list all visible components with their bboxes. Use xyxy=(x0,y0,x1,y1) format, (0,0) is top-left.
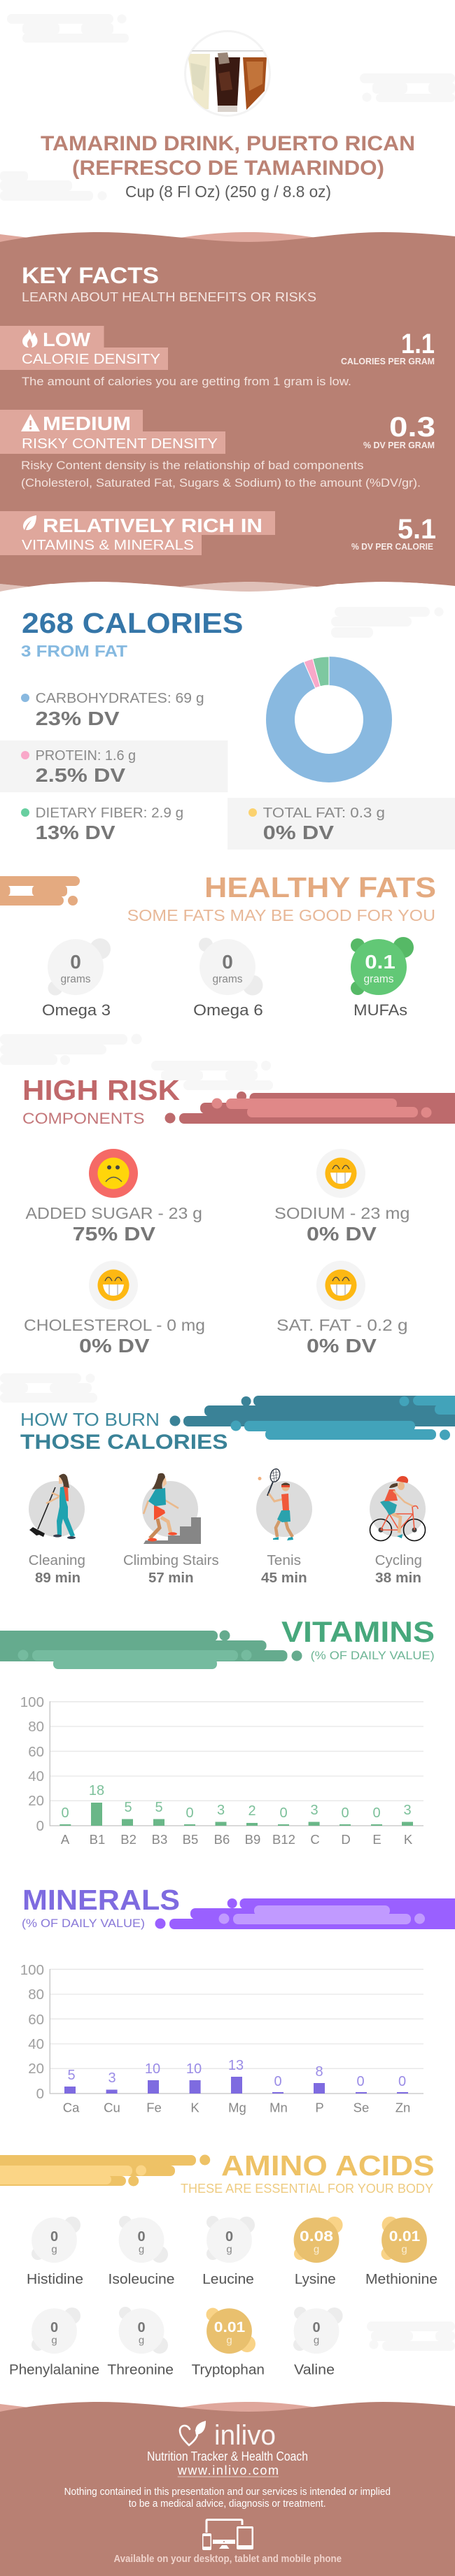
bar chart: vitamins: B6 xyxy=(214,1832,230,1847)
amino: tryptophan: 0.01 xyxy=(214,2319,246,2335)
activity: climbing stairs: Climbing Stairs xyxy=(123,1553,219,1568)
fact: low calorie density: The amount of calories you are getting from 1 gram is low. xyxy=(22,375,351,388)
bar chart: vitamins: B9 xyxy=(245,1832,260,1847)
bar chart: vitamins: 0 xyxy=(341,1805,349,1821)
badge: mufas: 0.1 xyxy=(365,951,396,973)
bar chart: minerals: 10 xyxy=(145,2061,160,2077)
heading: healthy fats: HEALTHY FATS xyxy=(204,871,436,903)
activity: cycling xyxy=(370,1476,426,1586)
amino: threonine: 0 xyxy=(137,2320,146,2335)
disclaimer: Nothing contained in this presentation and our services is intended or implied xyxy=(64,2486,391,2498)
fact: relatively rich in vitamins and minerals: VITAMINS & MINERALS xyxy=(22,538,194,553)
amino: phenylalanine: 0 xyxy=(50,2320,58,2335)
fact: relatively rich in vitamins and minerals: RELATIVELY RICH IN xyxy=(43,515,262,536)
legend: dietary fiber: 13% DV xyxy=(36,822,115,843)
bar chart: minerals: Zn xyxy=(396,2101,410,2115)
badge: omega 6: 0 xyxy=(222,951,233,973)
subheading: percent of daily value: (% OF DAILY VALUE) xyxy=(22,1917,145,1930)
badge: omega 3: 0 xyxy=(70,951,81,973)
amino: phenylalanine xyxy=(9,2307,99,2378)
fact: medium risky content density: Risky Content density is the relationship of bad components xyxy=(21,459,364,472)
bar chart: vitamins: 60 xyxy=(28,1744,44,1760)
subheading: SOME FATS MAY BE GOOD FOR YOU xyxy=(127,906,435,924)
legend: carbohydrates xyxy=(21,690,204,729)
bar chart: vitamins: B12 xyxy=(272,1832,295,1847)
risk: saturated fat xyxy=(276,1261,407,1357)
fact: medium risky content density: MEDIUM xyxy=(43,413,131,434)
bar chart: minerals: 0 xyxy=(274,2074,282,2089)
decoration cloud: yellow xyxy=(0,2155,210,2186)
panel: amino acids xyxy=(0,2149,438,2378)
bar chart: minerals: Fe xyxy=(146,2101,162,2115)
bar chart: vitamins: B3 xyxy=(152,1832,167,1847)
amino: tryptophan: g xyxy=(226,2335,232,2347)
bar chart: minerals: 0 xyxy=(398,2074,406,2089)
decoration cloud: teal xyxy=(169,1396,455,1440)
amino: methionine: g xyxy=(401,2244,407,2256)
activity: tennis: Tenis xyxy=(267,1553,301,1568)
serving size: Cup (8 Fl Oz) (250 g / 8.8 oz) xyxy=(125,183,331,201)
bar chart: minerals xyxy=(20,1962,424,2115)
amino: valine: g xyxy=(314,2335,319,2347)
bar chart: minerals: 5 xyxy=(67,2068,76,2083)
bar chart: minerals: 3 xyxy=(108,2070,116,2086)
risk: sodium: SODIUM - 23 mg xyxy=(274,1204,410,1222)
amino: phenylalanine: g xyxy=(51,2335,57,2347)
amino: lysine: g xyxy=(314,2244,319,2256)
activity: cleaning: Cleaning xyxy=(29,1553,85,1568)
amino: leucine: g xyxy=(226,2244,232,2256)
panel: calories xyxy=(0,607,455,850)
title: TAMARIND DRINK, PUERTO RICAN xyxy=(41,132,415,155)
bar chart: minerals: 80 xyxy=(28,1987,44,2003)
bar chart: minerals: Mn xyxy=(270,2101,288,2115)
heading: how to burn: HOW TO BURN xyxy=(20,1410,160,1430)
activity: cycling: 38 min xyxy=(375,1570,421,1586)
panel: key facts xyxy=(0,232,455,601)
subheading: from fat: 3 FROM FAT xyxy=(21,642,127,660)
badge: omega 6 xyxy=(193,938,263,1019)
fact: relatively rich in vitamins and minerals: 5.1 xyxy=(398,514,436,545)
fact: relatively rich in vitamins and minerals xyxy=(0,511,436,555)
heading: 268 calories: 268 CALORIES xyxy=(22,607,244,639)
fact: medium risky content density xyxy=(0,410,435,489)
heading: minerals: MINERALS xyxy=(22,1884,180,1916)
bar chart: minerals: P xyxy=(315,2101,324,2115)
logo: inlivo xyxy=(180,2420,276,2451)
fact: medium risky content density: RISKY CONTENT DENSITY xyxy=(22,436,218,452)
fact: low calorie density: LOW xyxy=(43,329,90,350)
amino: methionine xyxy=(365,2217,438,2287)
amino: valine: 0 xyxy=(312,2320,321,2335)
risk: cholesterol xyxy=(24,1261,205,1357)
legend: protein: 2.5% DV xyxy=(36,764,125,786)
amino: lysine xyxy=(294,2217,343,2287)
amino: histidine: 0 xyxy=(50,2229,58,2245)
badge: omega 3: Omega 3 xyxy=(42,1001,111,1019)
heading: key facts: KEY FACTS xyxy=(22,263,159,288)
panel: vitamins xyxy=(0,1615,435,1847)
icon: warning xyxy=(21,414,40,431)
bar chart: vitamins: D xyxy=(341,1832,351,1847)
fact: low calorie density xyxy=(0,326,435,388)
amino: leucine: 0 xyxy=(225,2229,233,2245)
badge: omega 6: grams xyxy=(212,973,243,985)
disclaimer: to be a medical advice, diagnosis or treatment. xyxy=(129,2498,326,2510)
risk: saturated fat: 0% DV xyxy=(307,1335,377,1357)
amino: tryptophan xyxy=(192,2307,265,2378)
bar chart: vitamins: 18 xyxy=(89,1783,104,1798)
legend: dietary fiber: DIETARY FIBER: 2.9 g xyxy=(36,805,183,821)
amino: isoleucine xyxy=(108,2216,175,2287)
bar chart: vitamins: 0 xyxy=(36,1818,44,1834)
risk: added sugar xyxy=(25,1149,202,1245)
logo: inlivo: inlivo xyxy=(214,2420,276,2451)
bar chart: vitamins: B2 xyxy=(120,1832,136,1847)
legend: protein xyxy=(0,740,228,792)
bar chart: vitamins: 5 xyxy=(124,1800,132,1815)
heading: high risk: HIGH RISK xyxy=(22,1074,180,1106)
decoration cloud: green xyxy=(0,1631,302,1669)
risk: saturated fat: SAT. FAT - 0.2 g xyxy=(276,1316,407,1334)
amino: threonine: g xyxy=(139,2335,144,2347)
fact: medium risky content density: 0.3 xyxy=(389,412,435,443)
amino: histidine xyxy=(27,2217,83,2287)
bar chart: vitamins: K xyxy=(404,1832,413,1847)
bar chart: vitamins: 2 xyxy=(248,1803,256,1819)
amino: valine xyxy=(293,2307,343,2378)
fact: medium risky content density: % DV PER GRAM xyxy=(363,441,435,450)
donut chart xyxy=(280,657,378,768)
amino: phenylalanine: Phenylalanine xyxy=(9,2363,99,2378)
activity: cleaning: 89 min xyxy=(35,1570,80,1586)
legend: carbohydrates: 23% DV xyxy=(36,708,120,729)
amino: lysine: 0.08 xyxy=(300,2228,333,2245)
bar chart: vitamins: 80 xyxy=(28,1719,44,1735)
panel: minerals xyxy=(20,1884,455,2115)
amino: threonine xyxy=(107,2307,174,2378)
badge: mufas: MUFAs xyxy=(354,1001,407,1019)
fact: medium risky content density: (Cholesterol, Saturated Fat, Sugars & Sodium) to the amount (%DV/gr). xyxy=(21,477,421,489)
amino: leucine: Leucine xyxy=(202,2272,254,2287)
hero photo: three drinks xyxy=(184,30,271,117)
bar chart: vitamins: 3 xyxy=(217,1803,225,1818)
heading: key facts xyxy=(22,263,316,304)
panel: healthy fats xyxy=(0,871,436,1019)
bar chart: minerals: Ca xyxy=(63,2101,80,2115)
bar chart: minerals: 8 xyxy=(315,2064,323,2080)
risk: sodium: 0% DV xyxy=(307,1223,377,1245)
badge: mufas: grams xyxy=(363,973,394,985)
badge: omega 3: grams xyxy=(60,973,91,985)
decoration cloud: orange xyxy=(0,876,80,906)
bar chart: minerals: 0 xyxy=(36,2086,44,2102)
heading: key facts: LEARN ABOUT HEALTH BENEFITS OR RISKS xyxy=(22,289,316,304)
heading: amino acids: AMINO ACIDS xyxy=(221,2149,435,2182)
activity: climbing stairs xyxy=(123,1473,219,1586)
bar chart: vitamins: 40 xyxy=(28,1768,44,1784)
subheading: components: COMPONENTS xyxy=(22,1110,144,1127)
legend: protein: PROTEIN: 1.6 g xyxy=(36,747,136,764)
activity: tennis xyxy=(256,1468,312,1586)
panel: footer xyxy=(0,2402,455,2576)
bar chart: minerals: 10 xyxy=(186,2061,202,2077)
bar chart: minerals: Mg xyxy=(228,2101,246,2115)
tagline: Nutrition Tracker & Health Coach xyxy=(147,2449,308,2463)
risk: cholesterol: CHOLESTEROL - 0 mg xyxy=(24,1316,205,1334)
activity: climbing stairs: 57 min xyxy=(148,1570,193,1586)
amino: histidine: Histidine xyxy=(27,2272,83,2287)
bar chart: vitamins: 0 xyxy=(61,1805,69,1821)
amino: methionine: 0.01 xyxy=(389,2228,421,2245)
bar chart: vitamins: A xyxy=(61,1832,70,1847)
amino: methionine: Methionine xyxy=(365,2272,438,2287)
bar chart: minerals: K xyxy=(190,2101,200,2115)
activity: tennis: 45 min xyxy=(261,1570,307,1586)
risk: added sugar: ADDED SUGAR - 23 g xyxy=(25,1204,202,1222)
bar chart: vitamins: E xyxy=(372,1832,382,1847)
badge: omega 6: Omega 6 xyxy=(193,1001,263,1019)
amino: valine: Valine xyxy=(294,2363,335,2378)
bar chart: vitamins: 100 xyxy=(20,1694,44,1710)
bar chart: vitamins: 20 xyxy=(28,1793,44,1809)
legend: total fat: TOTAL FAT: 0.3 g xyxy=(263,805,385,821)
heading: vitamins: VITAMINS xyxy=(281,1615,435,1648)
website link: www.inlivo.com xyxy=(177,2463,279,2477)
bar chart: vitamins xyxy=(20,1694,424,1847)
bar chart: minerals: 60 xyxy=(28,2012,44,2028)
panel: high risk xyxy=(22,1074,455,1357)
fact: low calorie density: CALORIES PER GRAM xyxy=(341,357,435,366)
badge: omega 3 xyxy=(42,938,111,1019)
fact: low calorie density: 1.1 xyxy=(401,329,435,359)
bar chart: vitamins: B1 xyxy=(90,1832,105,1847)
panel: how to burn those calories xyxy=(20,1396,455,1586)
subheading: percent of daily value: (% OF DAILY VALUE) xyxy=(311,1649,435,1662)
activity: cleaning xyxy=(29,1474,85,1586)
decoration cloud: red xyxy=(165,1092,455,1124)
bar chart: minerals: 20 xyxy=(28,2061,44,2077)
amino: isoleucine: 0 xyxy=(137,2229,146,2245)
amino: leucine xyxy=(202,2216,255,2287)
bar chart: vitamins: 3 xyxy=(310,1803,318,1818)
badge: mufas xyxy=(351,937,414,1019)
legend: total fat xyxy=(227,798,455,850)
fact: relatively rich in vitamins and minerals: % DV PER CALORIE xyxy=(351,542,433,552)
fact: low calorie density: CALORIE DENSITY xyxy=(22,352,160,367)
bar chart: minerals: 100 xyxy=(20,1962,44,1978)
bar chart: vitamins: 0 xyxy=(279,1805,288,1821)
title xyxy=(41,132,415,180)
decoration cloud: purple xyxy=(155,1898,455,1929)
bar chart: minerals: Se xyxy=(354,2101,369,2115)
subheading: THESE ARE ESSENTIAL FOR YOUR BODY xyxy=(181,2182,433,2196)
risk: cholesterol: 0% DV xyxy=(79,1335,150,1357)
availability note: Available on your desktop, tablet and mobile phone xyxy=(113,2553,342,2565)
disclaimer xyxy=(64,2486,391,2510)
bar chart: vitamins: C xyxy=(310,1832,320,1847)
bar chart: minerals: 40 xyxy=(28,2036,44,2052)
bar chart: vitamins: 5 xyxy=(155,1800,163,1815)
amino: isoleucine: g xyxy=(139,2244,144,2256)
icon: leaf xyxy=(23,515,36,530)
bar chart: vitamins: 0 xyxy=(186,1805,194,1821)
amino: isoleucine: Isoleucine xyxy=(108,2272,175,2287)
bar chart: vitamins: 0 xyxy=(372,1805,381,1821)
bar chart: minerals: Cu xyxy=(104,2101,120,2115)
icon: devices xyxy=(202,2519,253,2550)
bar chart: minerals: 0 xyxy=(356,2074,365,2089)
bar chart: minerals: 13 xyxy=(228,2058,244,2073)
activity: cycling: Cycling xyxy=(375,1553,422,1568)
legend: total fat: 0% DV xyxy=(263,822,334,843)
amino: tryptophan: Tryptophan xyxy=(192,2363,265,2378)
bar chart: vitamins: B5 xyxy=(183,1832,198,1847)
title: (REFRESCO DE TAMARINDO) xyxy=(72,157,384,180)
amino: threonine: Threonine xyxy=(107,2363,174,2378)
legend: carbohydrates: CARBOHYDRATES: 69 g xyxy=(36,690,204,706)
amino: histidine: g xyxy=(51,2244,57,2256)
heading: those calories: THOSE CALORIES xyxy=(20,1431,228,1454)
icon: flame xyxy=(22,329,38,348)
bar chart: vitamins: 3 xyxy=(403,1803,412,1818)
risk: sodium xyxy=(274,1149,410,1245)
legend: dietary fiber xyxy=(21,805,183,843)
risk: added sugar: 75% DV xyxy=(73,1223,155,1245)
amino: lysine: Lysine xyxy=(295,2272,336,2287)
